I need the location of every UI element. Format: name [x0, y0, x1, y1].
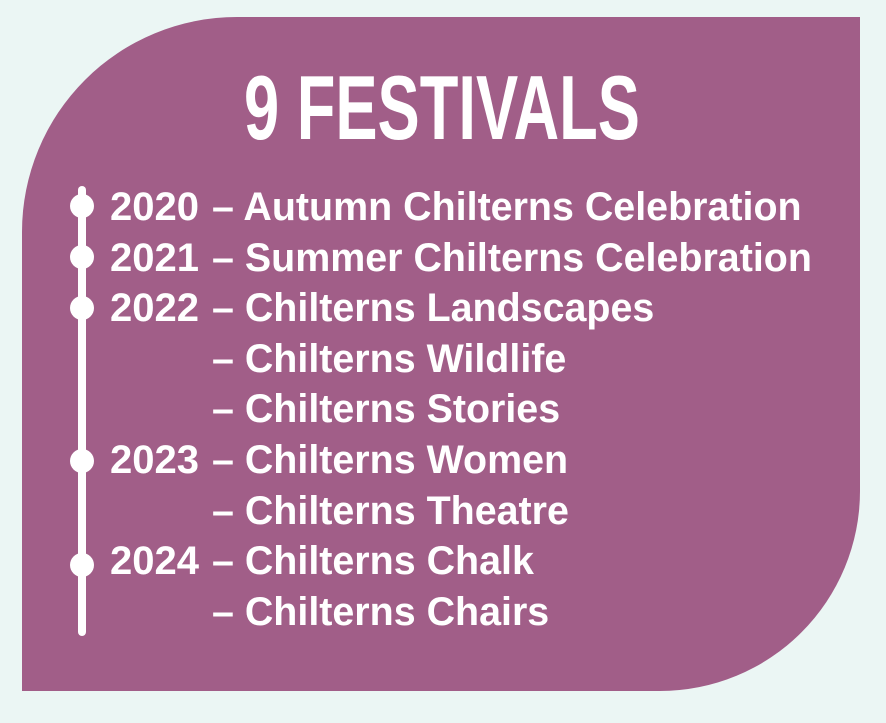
item 2023 theatre: – Chilterns Theatre	[212, 489, 569, 533]
dot 2024	[70, 553, 94, 577]
item 2023 women: – Chilterns Women	[212, 438, 568, 482]
year 2023: 2023	[110, 438, 199, 482]
dot 2023	[70, 449, 94, 473]
dot 2022	[70, 296, 94, 320]
festival list	[110, 185, 812, 634]
item 2022 wildlife: – Chilterns Wildlife	[212, 337, 566, 381]
item 2020: – Autumn Chilterns Celebration	[212, 185, 802, 229]
year 2021: 2021	[110, 236, 199, 280]
title: 9 FESTIVALS	[244, 58, 640, 159]
dot 2020	[70, 194, 94, 218]
item 2022 stories: – Chilterns Stories	[212, 387, 560, 431]
year 2020: 2020	[110, 185, 199, 229]
item 2021: – Summer Chilterns Celebration	[212, 236, 812, 280]
dot 2021	[70, 245, 94, 269]
item 2024 chairs: – Chilterns Chairs	[212, 590, 549, 634]
item 2022 landscapes: – Chilterns Landscapes	[212, 286, 654, 330]
year 2024: 2024	[110, 539, 199, 583]
item 2024 chalk: – Chilterns Chalk	[212, 539, 534, 583]
year 2022: 2022	[110, 286, 199, 330]
timeline line	[78, 186, 86, 636]
